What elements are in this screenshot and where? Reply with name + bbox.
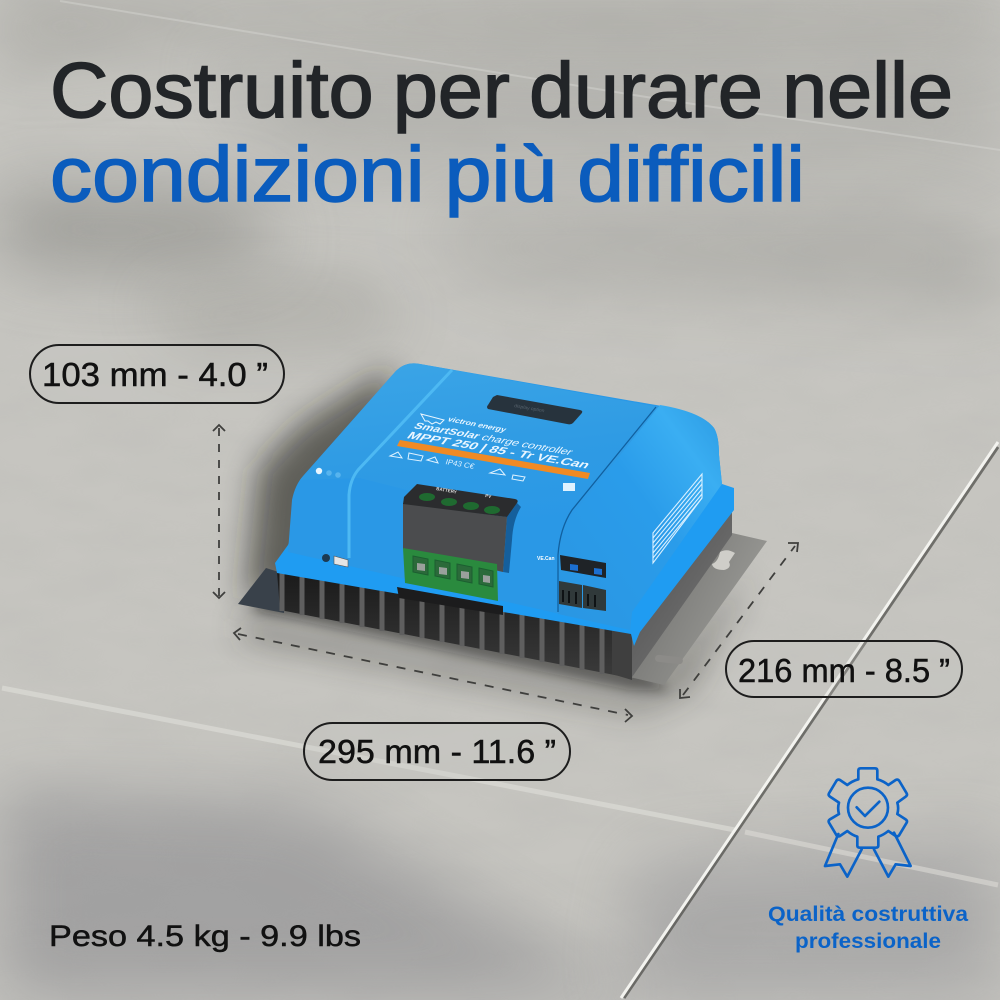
dimension: height [213,425,225,598]
solar charge controller [238,363,767,685]
pill: length 295 mm [304,723,570,780]
title line 1: Costruito per durare nelle [50,46,953,134]
title [50,46,953,218]
terminal labels: BATTERY [436,486,457,495]
side wall of heat sink [622,512,732,680]
certification marks: IP43 C€ [444,458,476,471]
terminal shadow on body [503,503,521,573]
icon: quality gear badge [825,768,911,877]
orange stripe [397,440,590,479]
brand name: victron energy [446,415,509,434]
ventilation label [653,474,702,563]
weight text: Peso 4.5 kg - 9.9 lbs [49,920,361,953]
cover seam left [349,370,452,558]
socket highlights [417,563,490,583]
pill: length 295 mm: 295 mm - 11.6 ” [318,733,556,770]
certification marks [390,452,575,491]
control connectors [559,581,606,611]
terminal housing [403,503,507,572]
right cover [558,405,722,630]
body front and sides [288,363,722,630]
terminal block: PV [485,493,492,499]
pill: depth 216 mm [726,641,962,697]
device shadow [240,368,750,712]
pill: height 103 mm [30,345,284,403]
cable glands [419,493,500,514]
model name: MPPT 250 | 85 - Tr VE.Can [404,430,593,471]
quality caption: Qualità costruttiva [768,903,968,926]
pill: depth 216 mm: 216 mm - 8.5 ” [738,652,950,689]
top face [300,363,664,530]
display plate: display option [514,403,545,414]
pill: height 103 mm: 103 mm - 4.0 ” [42,356,268,393]
status LEDs [316,468,341,478]
terminal block [397,484,518,615]
dimension: length [234,628,632,722]
title line 2: condizioni più difficili [50,130,805,218]
right mounting plate [625,533,767,685]
display plate [487,395,582,424]
product line: SmartSolar charge controller [411,421,576,458]
dimension: depth [680,543,798,698]
quality caption [768,903,968,953]
VE.Can ports: VE.Can [537,556,555,562]
connector sockets [413,556,493,587]
terminal cover top [403,484,518,517]
brand label text [404,414,593,471]
VE.Can ports [537,555,606,578]
left mounting plate [238,568,285,613]
heat sink [277,572,632,680]
quality caption: professionale [795,930,941,953]
black clip [397,587,503,615]
logo mark [421,414,444,424]
front USB port [322,554,348,567]
green connector [403,548,498,601]
flange [275,484,734,646]
cover seam right [558,407,656,612]
